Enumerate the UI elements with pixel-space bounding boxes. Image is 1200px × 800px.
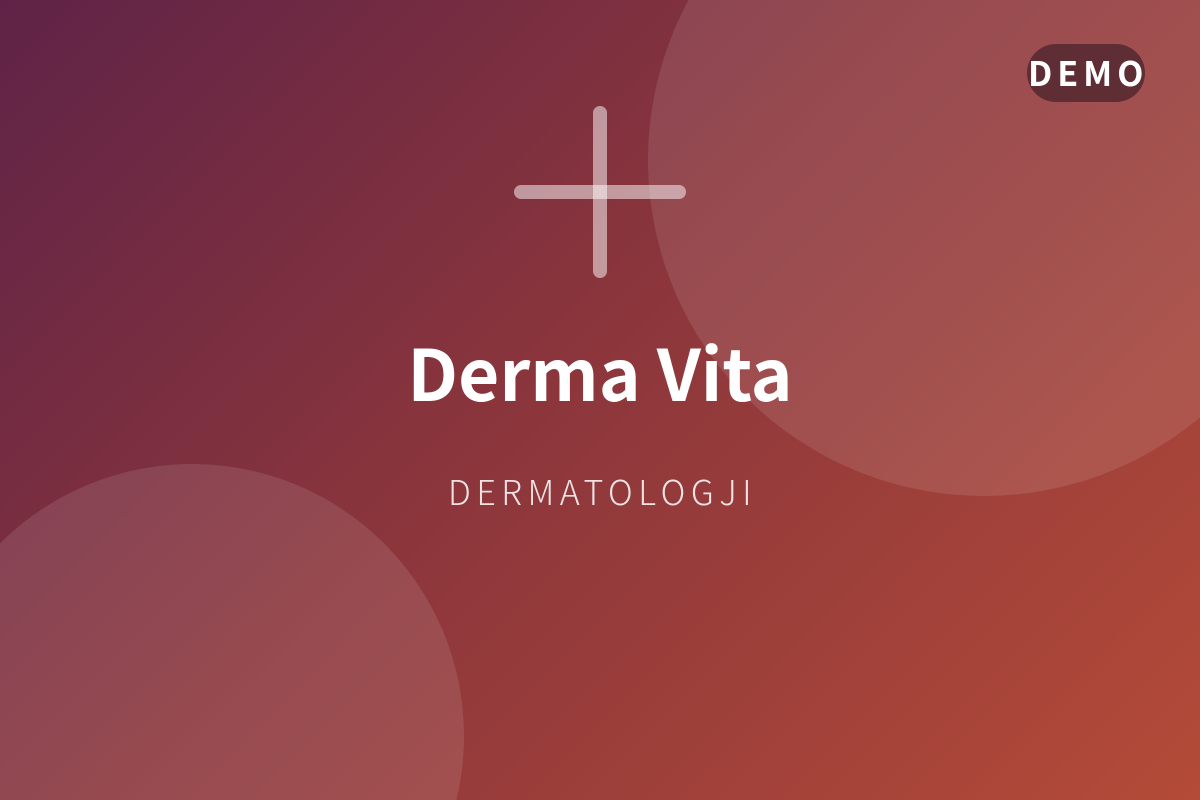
subtitle: DERMATOLOGJI bbox=[448, 466, 757, 515]
decorative circle: top right bbox=[648, 0, 1200, 496]
decorative circle: bottom left bbox=[0, 464, 464, 800]
demo badge: DEMO bbox=[1028, 47, 1148, 96]
icon: medical cross bbox=[514, 106, 686, 278]
title: Derma Vita bbox=[407, 320, 793, 422]
